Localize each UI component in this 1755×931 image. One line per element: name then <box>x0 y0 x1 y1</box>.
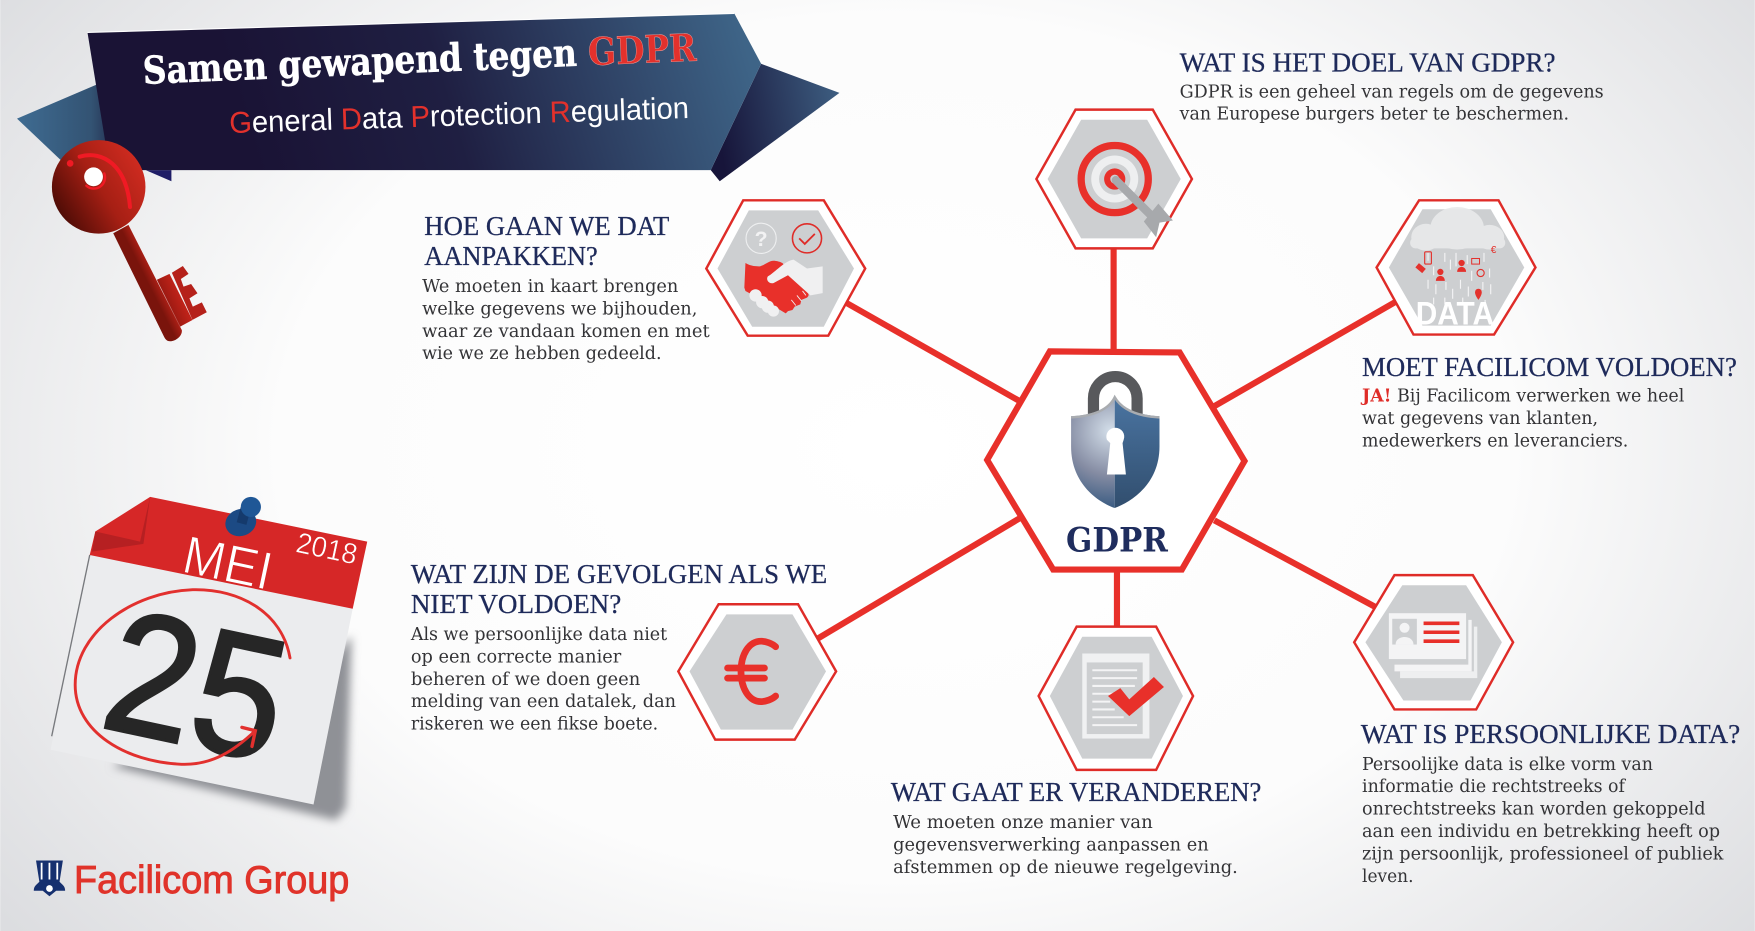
banner title text: Samen gewapend tegen GDPR <box>142 25 698 93</box>
icon: blue push pin <box>221 497 261 541</box>
banner subtitle text: General Data Protection Regulation <box>229 92 689 140</box>
body text: JA! Bij Facilicom verwerken we heel <box>1360 387 1685 407</box>
title banner <box>17 13 839 181</box>
text block: hoe gaan we dat aanpakken <box>422 211 710 364</box>
body text: leven. <box>1362 867 1413 887</box>
body text: waar ze vandaan komen en met <box>422 322 710 342</box>
body text: onrechtstreeks kan worden gekoppeld <box>1362 800 1706 820</box>
icon: shield padlock <box>1071 377 1159 508</box>
body text: medewerkers en leveranciers. <box>1362 431 1628 451</box>
heading: WAT IS HET DOEL VAN GDPR? <box>1180 48 1556 78</box>
hub label: GDPR <box>1066 520 1169 560</box>
body text: riskeren we een fikse boete. <box>411 715 658 735</box>
icon: crest <box>34 861 65 896</box>
body text: GDPR is een geheel van regels om de gegevens <box>1180 82 1604 102</box>
body text: Persoolijke data is elke vorm van <box>1362 755 1653 775</box>
body text: gegevensverwerking aanpassen en <box>893 835 1209 855</box>
company name: Facilicom Group <box>74 859 349 902</box>
calendar red header <box>90 497 367 609</box>
icon hexagon: data cloud: € <box>1491 245 1497 256</box>
body text: van Europese burgers beter te beschermen. <box>1179 105 1569 125</box>
date number: 25 <box>90 572 303 799</box>
heading: HOE GAAN WE DAT <box>424 211 670 241</box>
month label: MEI <box>178 525 278 602</box>
text block: wat is persoonlijke data <box>1361 719 1740 887</box>
body text: welke gegevens we bijhouden, <box>422 299 697 319</box>
heading: WAT IS PERSOONLIJKE DATA? <box>1361 719 1740 749</box>
icon: red key <box>52 140 207 341</box>
heading: NIET VOLDOEN? <box>411 589 621 619</box>
body text <box>422 277 710 364</box>
body text: We moeten onze manier van <box>893 813 1153 833</box>
calendar: 25 mei 2018 <box>51 497 367 820</box>
text block: wat is het doel <box>1179 48 1604 125</box>
body text: op een correcte manier <box>411 647 622 667</box>
body text <box>1360 387 1685 451</box>
icon hexagon: document with check <box>1039 627 1193 770</box>
body text <box>1362 755 1724 887</box>
icon hexagon: target <box>1036 110 1192 248</box>
body text: aan een individu en betrekking heeft op <box>1362 822 1720 842</box>
central GDPR hexagon <box>987 351 1245 570</box>
logo: Facilicom Group <box>34 859 349 902</box>
heading <box>424 211 670 271</box>
red hand-drawn circle with arrow <box>75 590 290 764</box>
heading: WAT ZIJN DE GEVOLGEN ALS WE <box>411 559 827 589</box>
body text: beheren of we doen geen <box>411 670 640 690</box>
connector lines between GDPR hub and topics <box>817 246 1399 639</box>
DATA label: DATA <box>1416 296 1494 332</box>
heading <box>411 559 827 619</box>
text block: gevolgen <box>410 559 827 735</box>
body text: wie we ze hebben gedeeld. <box>422 344 662 364</box>
body text: We moeten in kaart brengen <box>422 277 678 297</box>
icon hexagon: euro <box>678 604 836 740</box>
calendar sheet <box>51 555 353 805</box>
heading: AANPAKKEN? <box>424 241 598 271</box>
text block: moet facilicom voldoen <box>1360 352 1737 451</box>
year label: 2018 <box>293 527 360 571</box>
heading: WAT GAAT ER VERANDEREN? <box>891 777 1261 807</box>
body text: Als we persoonlijke data niet <box>410 625 667 645</box>
body text: wat gegevens van klanten, <box>1362 409 1598 429</box>
icon hexagon: handshake: ? <box>755 227 768 251</box>
icon hexagon: data cloud <box>1377 200 1535 335</box>
body text: zijn persoonlijk, professioneel of publiek <box>1362 844 1724 864</box>
heading: MOET FACILICOM VOLDOEN? <box>1362 352 1737 382</box>
body text: afstemmen op de nieuwe regelgeving. <box>893 858 1238 878</box>
body text <box>410 625 676 735</box>
body text <box>893 813 1238 878</box>
body text: informatie die rechtstreeks of <box>1362 777 1627 797</box>
icon hexagon: handshake <box>706 200 865 336</box>
body text <box>1179 82 1604 125</box>
text block: wat gaat er veranderen <box>891 777 1261 878</box>
icon hexagon: ID cards <box>1354 575 1513 709</box>
body text: melding van een datalek, dan <box>411 692 676 712</box>
